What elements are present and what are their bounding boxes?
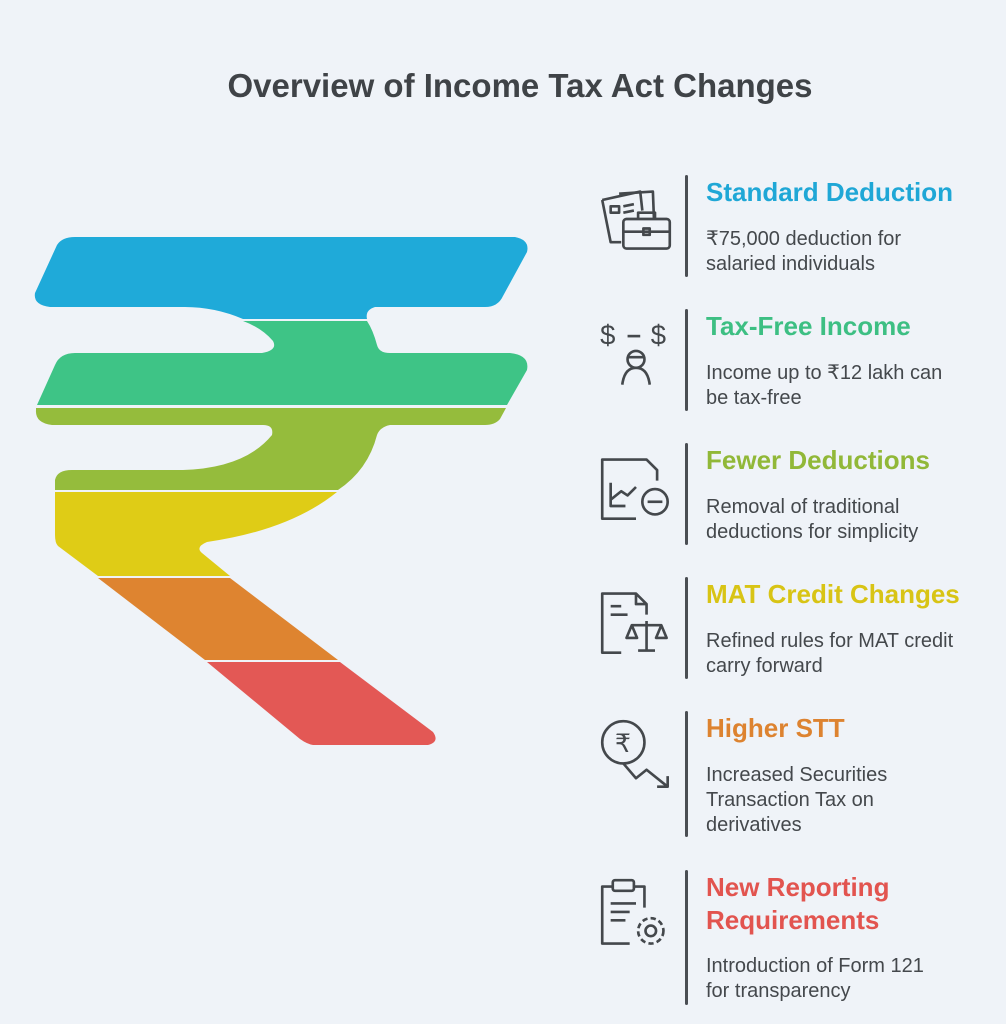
icon: rupee arrow down: ₹ [615,730,631,758]
icon: clipboard gear [600,878,665,945]
description: carry forward [706,655,823,677]
description [706,955,924,1002]
heading: Tax-Free Income [706,311,911,341]
band: standard deduction [35,237,527,319]
description: Income up to ₹12 lakh can [706,362,942,384]
section: tax-free income [600,309,942,411]
band: MAT credit [55,492,337,576]
section: higher STT [600,711,887,837]
icon: document minus [600,458,669,520]
description: for transparency [706,980,851,1002]
section: standard deduction [600,175,953,277]
title: Overview of Income Tax Act Changes [227,67,812,104]
description [706,630,954,677]
icon: document scales [600,592,668,654]
description [706,362,942,409]
description: Introduction of Form 121 [706,955,924,977]
description: Refined rules for MAT credit [706,630,953,652]
description [706,764,887,836]
band: fewer deductions [36,408,506,490]
heading: Higher STT [706,713,845,743]
icon: dollar minus person: $ [600,320,615,351]
section: reporting [600,870,924,1005]
rupee chart [34,237,528,745]
icon: dollar minus person: $ [651,320,666,351]
heading: New Reporting [706,872,889,902]
description [706,496,918,543]
description: salaried individuals [706,253,875,275]
band: tax-free income [37,321,527,405]
band: reporting [207,662,436,745]
description: deductions for simplicity [706,521,918,543]
heading: Standard Deduction [706,177,953,207]
description [706,228,901,275]
heading: Fewer Deductions [706,445,930,475]
description: derivatives [706,814,802,836]
description: Transaction Tax on [706,789,874,811]
band: higher STT [98,578,338,660]
icon: dollar minus person [600,320,666,385]
icon: documents briefcase [600,190,672,250]
section: fewer deductions [600,443,930,545]
description: be tax-free [706,387,802,409]
heading [706,872,889,935]
heading: MAT Credit Changes [706,579,960,609]
description: Increased Securities [706,764,887,786]
description: Removal of traditional [706,496,899,518]
section: MAT credit [600,577,960,679]
heading: Requirements [706,905,879,935]
description: ₹75,000 deduction for [706,228,901,250]
icon: rupee arrow down [600,720,669,788]
